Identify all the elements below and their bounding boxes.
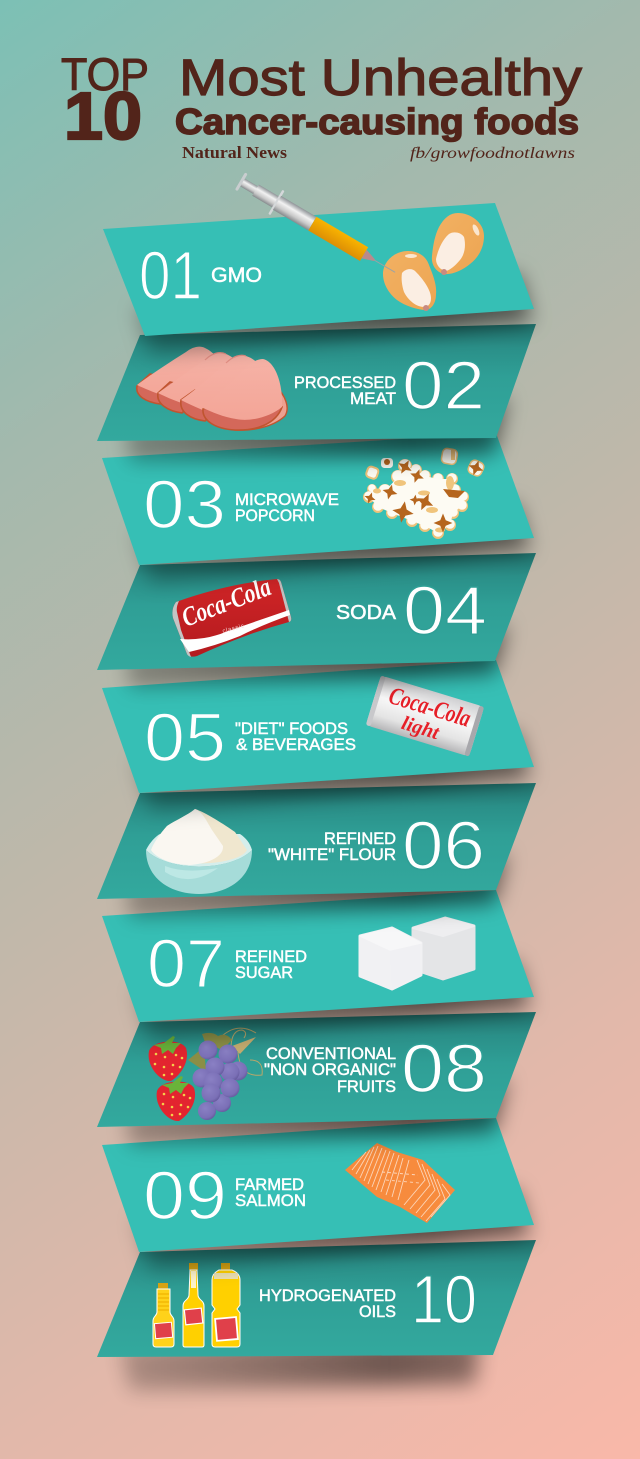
icon: popcorn	[363, 448, 486, 539]
number 03: 03	[143, 466, 226, 543]
panel: 07 refined sugar	[102, 890, 534, 1040]
ribbon 07	[102, 890, 534, 1022]
label hydrogenated oils: OILS	[359, 1302, 396, 1321]
ribbon 05	[102, 660, 534, 793]
heading: most unhealthy: Most Unhealthy	[179, 49, 583, 106]
label refined white flour	[268, 829, 396, 864]
number 08: 08	[401, 1030, 487, 1107]
icon: sugar cubes	[360, 918, 474, 989]
icon: coca-cola light can	[366, 675, 484, 757]
label refined sugar: REFINED	[235, 947, 307, 966]
label hydrogenated oils	[259, 1286, 396, 1321]
icon: strawberries and grapes	[149, 1028, 262, 1121]
label farmed salmon: FARMED	[235, 1175, 304, 1194]
label GMO: GMO	[211, 264, 262, 287]
label farmed salmon	[235, 1175, 306, 1210]
number 07: 07	[147, 925, 225, 1002]
label refined sugar	[235, 947, 307, 982]
source: natural news: Natural News	[182, 143, 287, 162]
panel: 03 microwave popcorn	[102, 433, 534, 582]
label diet foods and beverages: "DIET" FOODS	[235, 719, 348, 738]
ribbon 01	[103, 203, 534, 336]
panel: 08 conventional non organic fruits	[97, 1012, 536, 1146]
label processed meat	[294, 373, 396, 408]
number 01: 01	[139, 237, 202, 314]
panel: 10 hydrogenated oils	[97, 1240, 536, 1390]
label refined sugar: SUGAR	[235, 963, 293, 982]
label processed meat: MEAT	[350, 389, 396, 408]
icon: coca-cola light can: light	[399, 712, 443, 745]
ribbon 04	[97, 553, 536, 670]
label refined white flour: "WHITE" FLOUR	[268, 845, 396, 864]
icon: oil bottles	[153, 1263, 240, 1347]
label conventional non organic fruits: CONVENTIONAL	[266, 1044, 396, 1063]
label conventional non organic fruits: "NON ORGANIC"	[264, 1060, 396, 1079]
number 06: 06	[402, 807, 485, 884]
label microwave popcorn: MICROWAVE	[235, 490, 339, 509]
ribbon 08	[97, 1012, 536, 1127]
label processed meat: PROCESSED	[294, 373, 396, 392]
panel: 06 refined white flour	[97, 783, 536, 918]
ribbon 02	[97, 324, 536, 441]
label conventional non organic fruits: FRUITS	[337, 1077, 396, 1096]
heading: cancer-causing foods: Cancer-causing foods	[175, 101, 579, 142]
heading: 10: 10	[64, 79, 142, 154]
label farmed salmon: SALMON	[235, 1191, 306, 1210]
label soda: SODA	[336, 602, 397, 624]
icon: sliced ham	[137, 347, 287, 430]
number 09: 09	[143, 1157, 227, 1234]
ribbon 09	[102, 1118, 534, 1252]
icon: bowl of flour	[146, 809, 252, 894]
label microwave popcorn	[235, 490, 339, 525]
label diet foods and beverages	[235, 719, 356, 754]
panel: 02 processed meat	[97, 324, 536, 462]
label microwave popcorn: POPCORN	[235, 506, 315, 525]
number 02: 02	[402, 347, 485, 424]
label hydrogenated oils: HYDROGENATED	[259, 1286, 396, 1305]
ribbon 06	[97, 783, 536, 899]
panel: 05 diet foods and beverages	[102, 660, 534, 810]
label conventional non organic fruits	[264, 1044, 396, 1096]
heading: top: TOP	[61, 49, 149, 100]
title block	[61, 49, 583, 162]
number 10: 10	[411, 1261, 477, 1338]
number 04: 04	[403, 572, 487, 649]
source: facebook handle: fb/growfoodnotlawns	[410, 145, 575, 162]
number 05: 05	[144, 699, 226, 776]
icon: syringe and corn kernels	[233, 169, 484, 311]
panel: 04 soda	[97, 553, 536, 688]
icon: coca-cola light can: Coca-Cola	[386, 682, 474, 733]
panel: 01 GMO	[103, 169, 534, 354]
icon: salmon fillet	[345, 1143, 455, 1223]
ribbon 10	[97, 1240, 536, 1357]
label refined white flour: REFINED	[324, 829, 396, 848]
icon: coca-cola can	[172, 571, 291, 657]
icon: coca-cola can: classic	[222, 623, 245, 635]
label diet foods and beverages: & BEVERAGES	[236, 735, 356, 754]
ribbon 03	[102, 433, 534, 565]
panel: 09 farmed salmon	[102, 1118, 534, 1270]
icon: coca-cola can: Coca-Cola	[177, 571, 275, 633]
